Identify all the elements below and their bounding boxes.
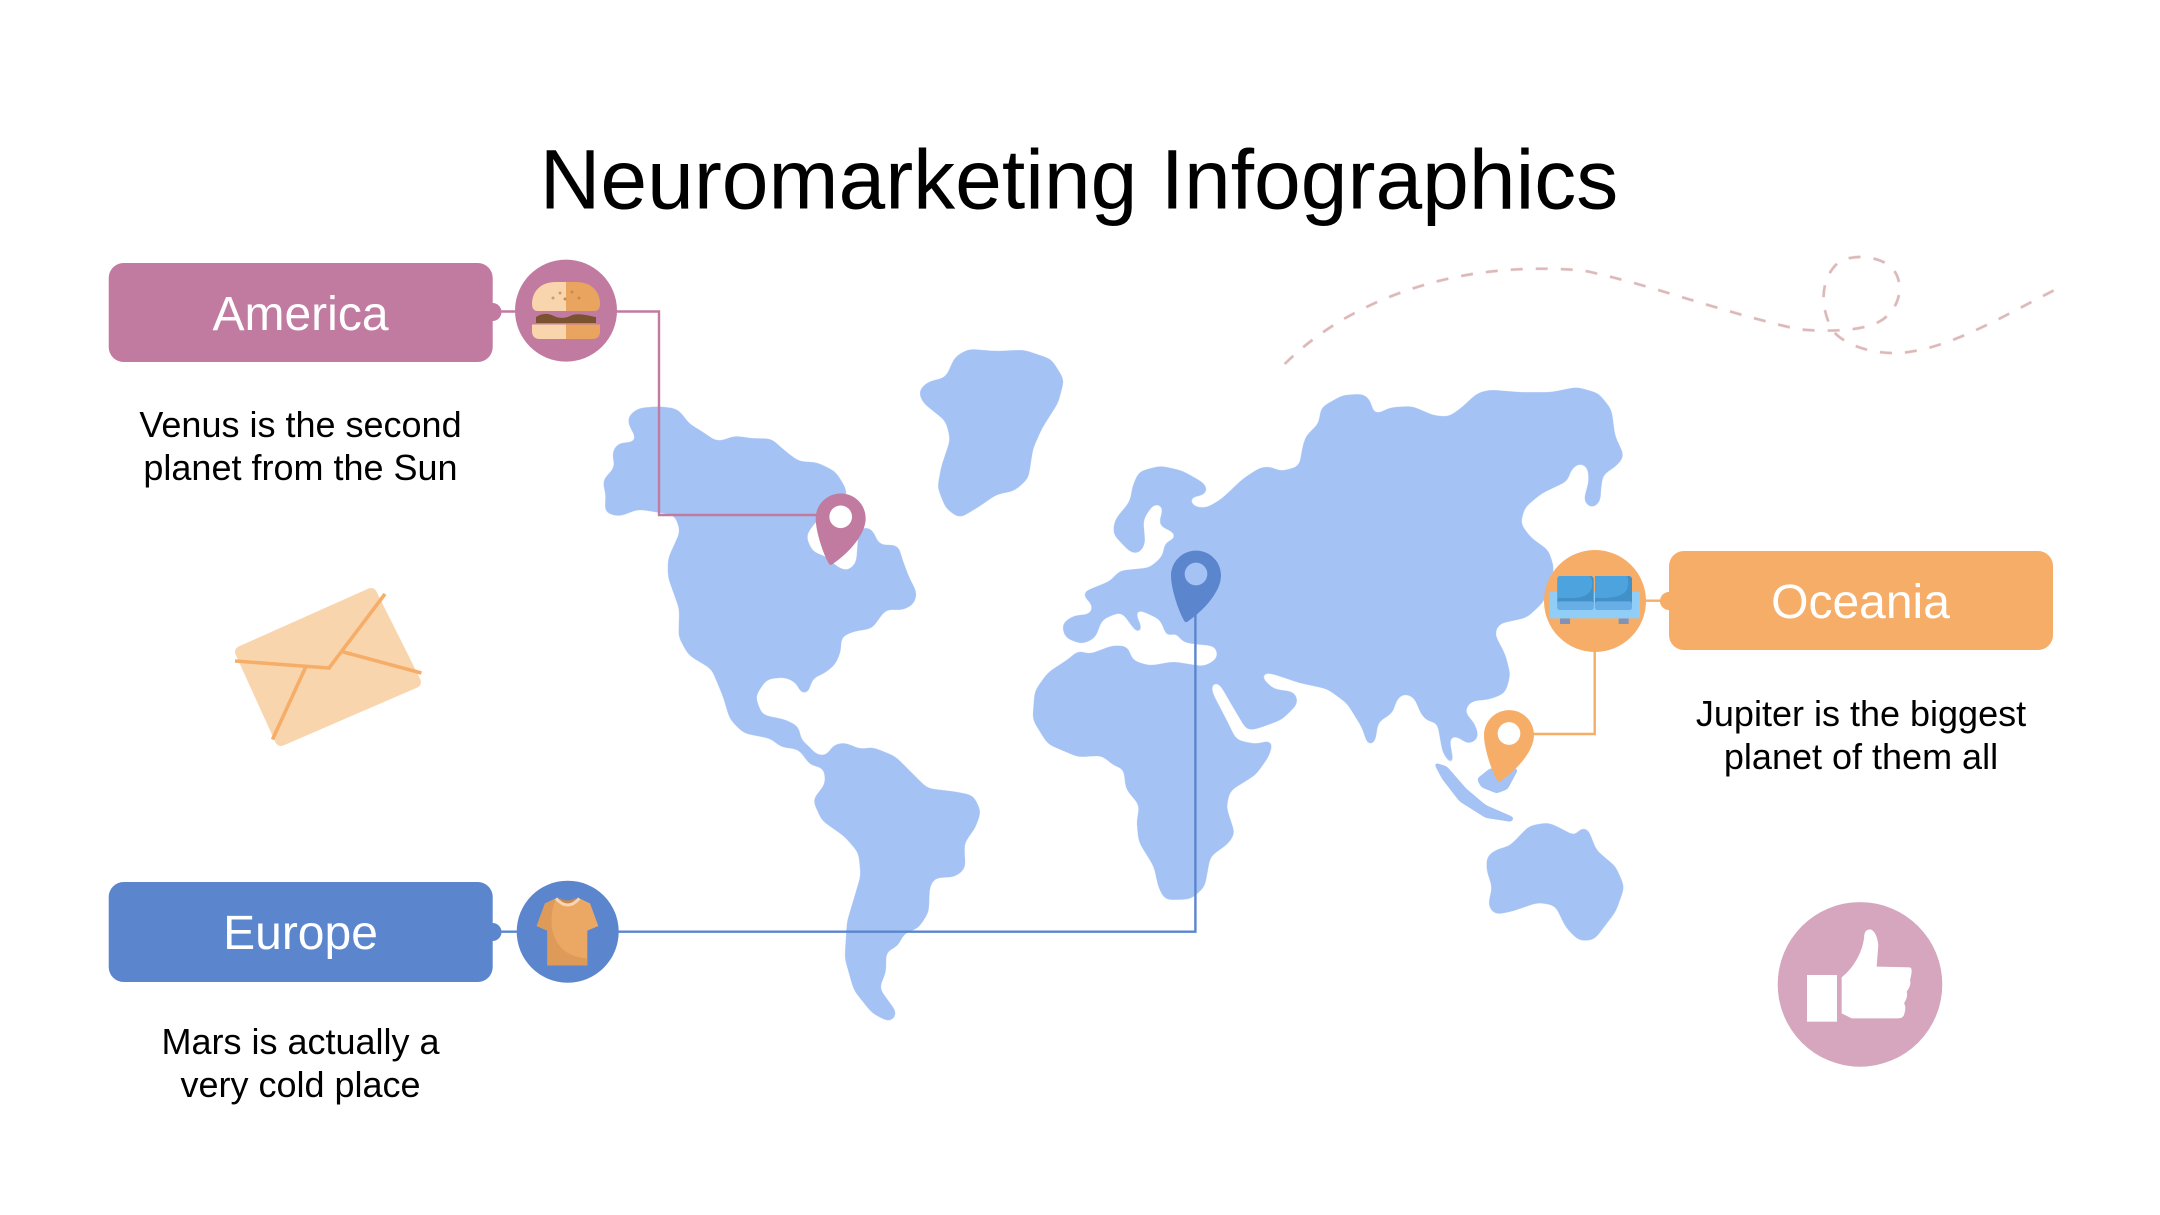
America connector dot — [484, 303, 502, 321]
icon: thumbs up — [1778, 902, 1942, 1067]
map: islands — [1434, 762, 1518, 822]
map: Australia — [1487, 822, 1625, 941]
map: Eurasia and Africa — [1033, 387, 1625, 900]
America description: Venus is the second — [139, 404, 462, 445]
America label box — [109, 263, 493, 362]
panel: Europe — [109, 882, 501, 1105]
Oceania connector dot — [1660, 592, 1678, 610]
connector: Europe — [495, 610, 1195, 932]
Oceania description: planet of them all — [1724, 736, 1998, 777]
pin: America — [816, 493, 866, 565]
icon: t-shirt — [517, 881, 619, 983]
Europe description: very cold place — [180, 1064, 421, 1105]
Europe description: Mars is actually a — [161, 1021, 441, 1062]
Oceania description: Jupiter is the biggest — [1696, 693, 2026, 734]
pin: Oceania — [1484, 710, 1534, 782]
connector: America — [495, 312, 825, 515]
icon: envelope — [235, 594, 421, 740]
map: Greenland — [918, 349, 1064, 518]
map: Americas — [602, 406, 981, 1023]
map: Borneo — [1477, 769, 1518, 793]
pin: Europe — [1171, 551, 1221, 622]
connector: Oceania — [1525, 600, 1665, 734]
Oceania label box — [1669, 551, 2053, 650]
America heading: America — [212, 288, 389, 341]
Europe heading: Europe — [223, 907, 378, 960]
title: Neuromarketing Infographics — [540, 132, 1618, 226]
Europe connector dot — [484, 923, 502, 941]
icon: burger — [515, 260, 617, 362]
dashed flight path — [1285, 257, 2054, 364]
map: Sumatra and Java — [1434, 762, 1514, 822]
panel: America — [109, 263, 501, 488]
America description: planet from the Sun — [143, 447, 458, 488]
Oceania heading: Oceania — [1771, 576, 1950, 629]
icon: sofa — [1544, 550, 1646, 652]
panel: Oceania — [1660, 551, 2053, 777]
map: continents — [602, 349, 1625, 1023]
world map — [602, 349, 1625, 1023]
Europe label box — [109, 882, 493, 982]
